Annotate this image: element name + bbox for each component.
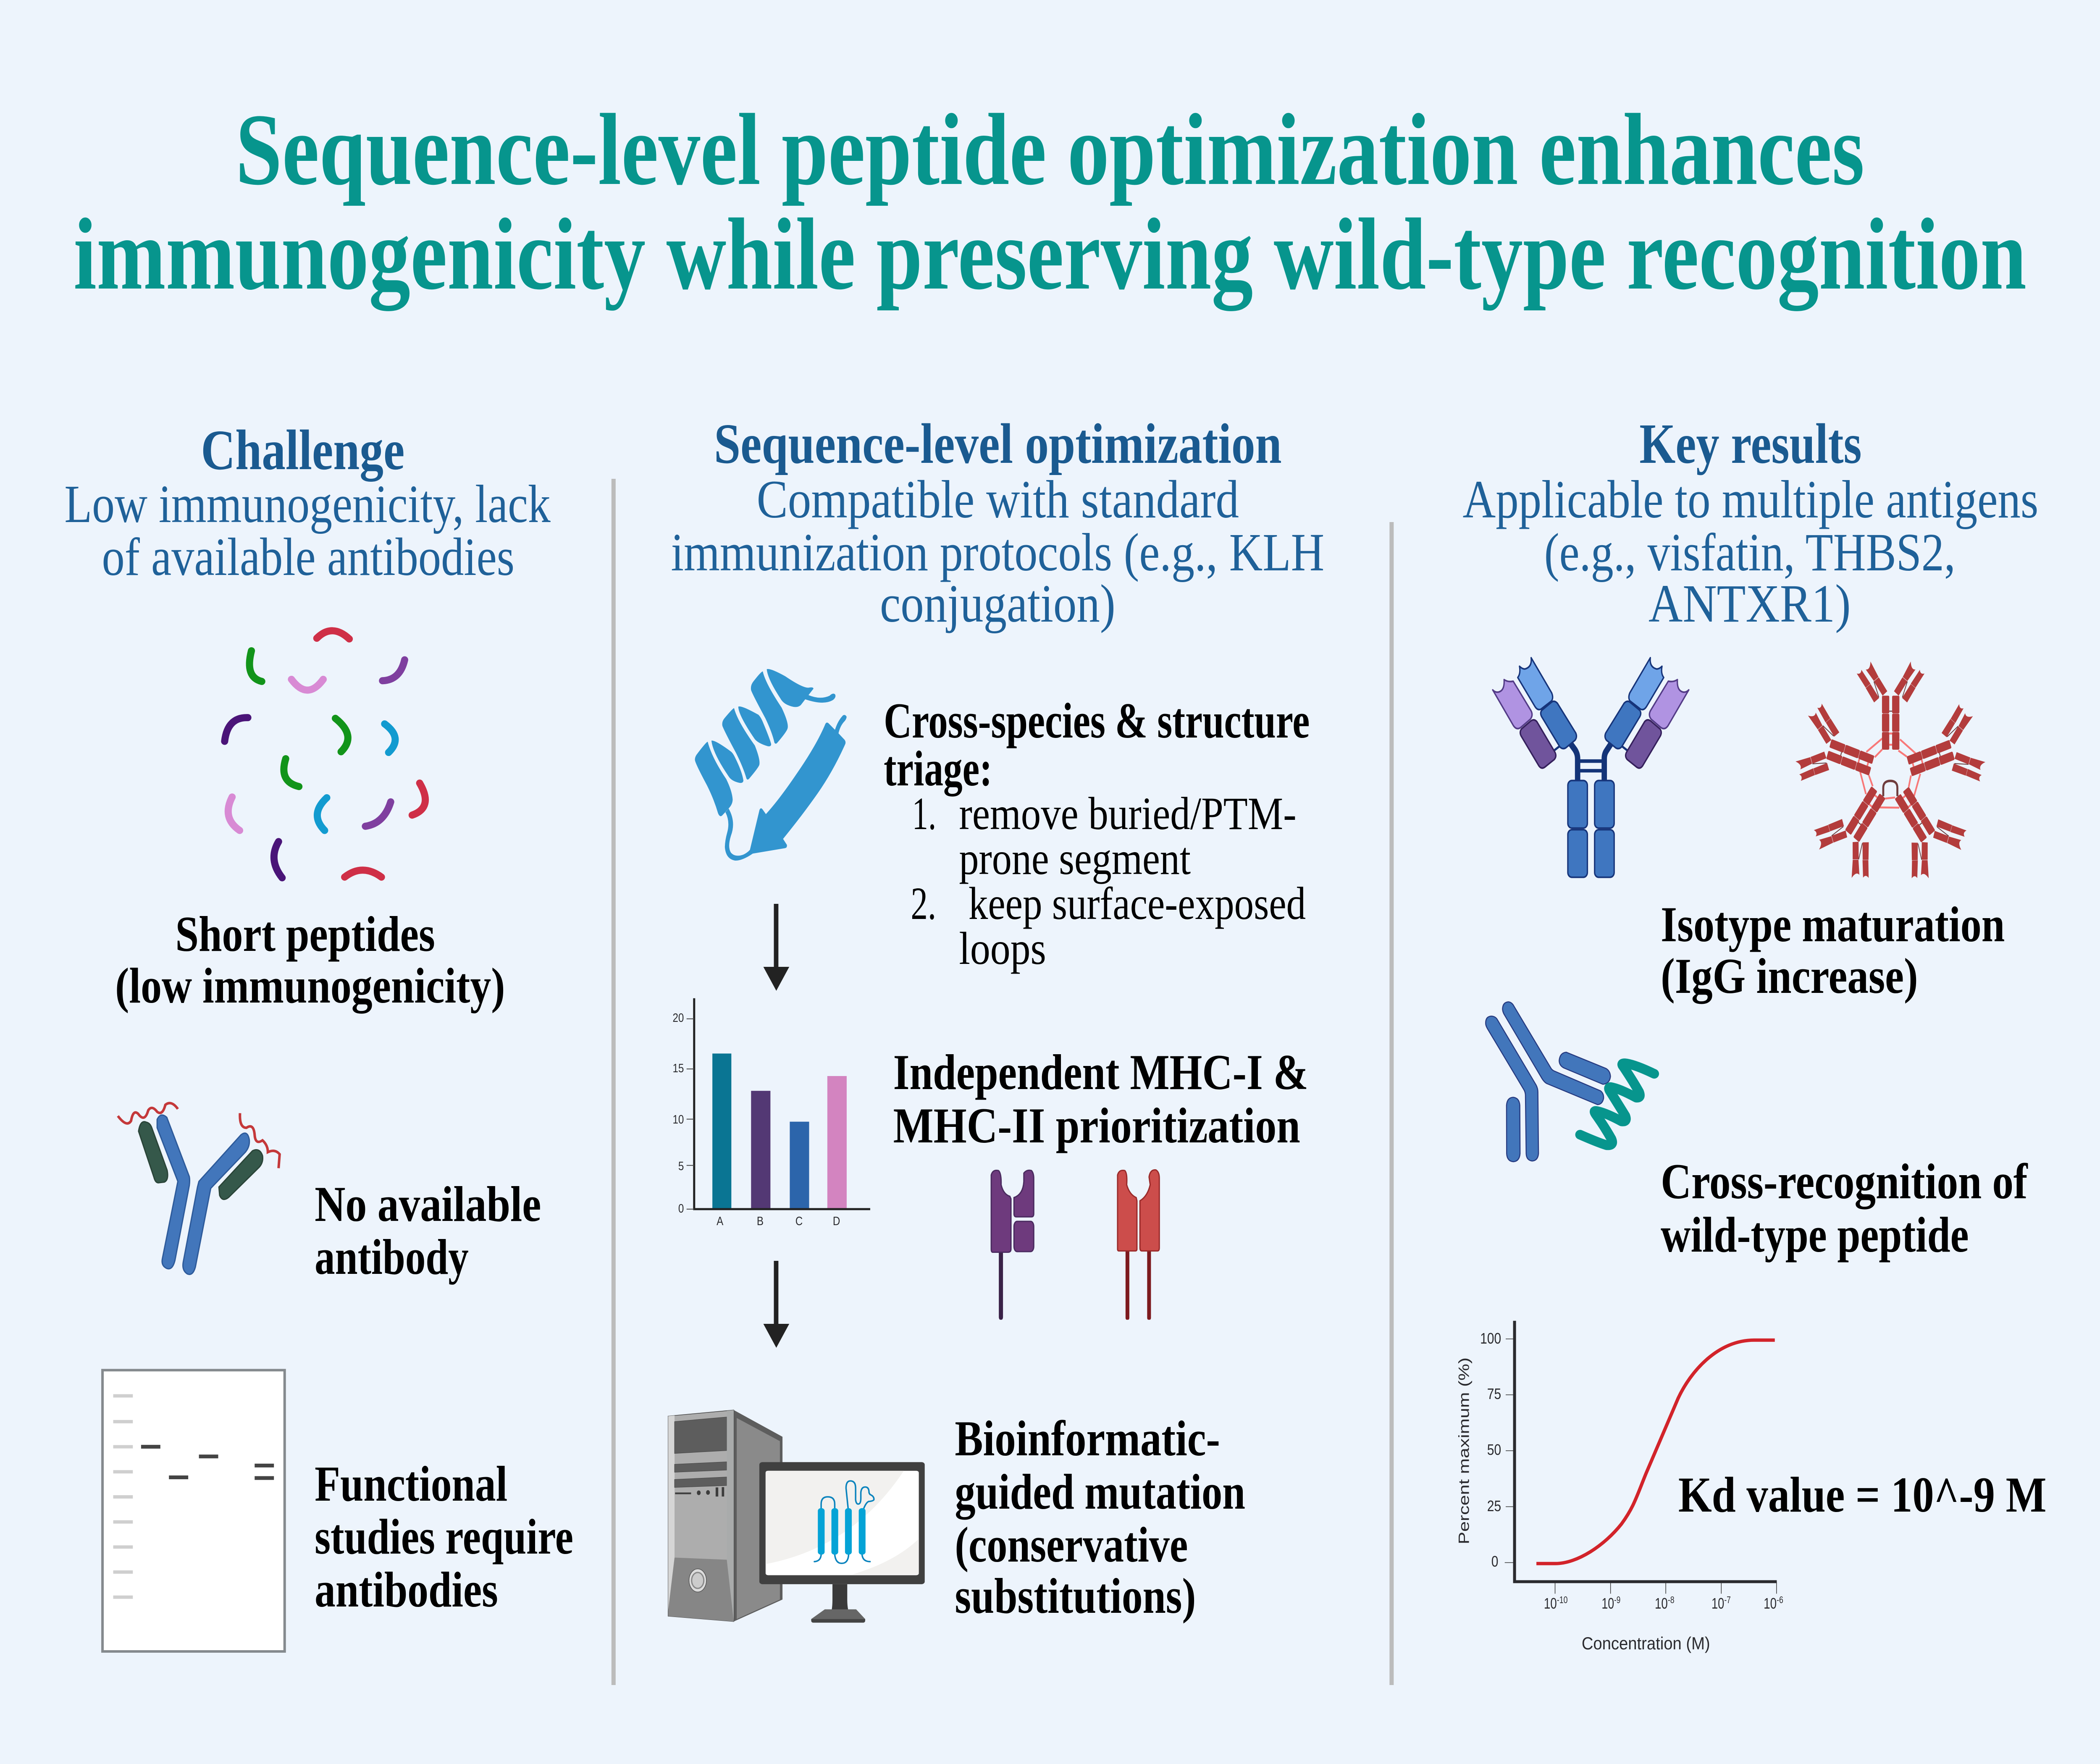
icon: protein structure ribbon (695, 669, 847, 861)
bar chart: 10 (672, 1113, 684, 1126)
icon: short peptides (225, 631, 425, 878)
title: Sequence-level peptide optimization enhances (236, 93, 1864, 206)
label: Kd value: Kd value = 10^-9 M (1678, 1467, 2047, 1522)
label: cross-recognition: wild-type peptide (1661, 1207, 1969, 1263)
heading: key results (1462, 412, 2038, 633)
icon: MHC class I (991, 1170, 1034, 1320)
icon: IgG antibody (1493, 658, 1689, 877)
icon: computer (668, 1410, 925, 1622)
label: cross-species triage: triage: (884, 741, 992, 796)
label: cross-species triage: 1. (912, 788, 936, 839)
chart: binding curve: 50 (1487, 1441, 1501, 1459)
label: cross-recognition: Cross-recognition of (1661, 1154, 2028, 1209)
chart: binding curve: 10 (1544, 1595, 1558, 1612)
label: cross-species triage: prone segment (959, 833, 1191, 884)
heading: challenge: Low immunogenicity, lack (64, 475, 551, 534)
icon: western blot gel (102, 1370, 285, 1651)
label: MHC prioritization (893, 1045, 1308, 1153)
heading: challenge (64, 418, 551, 587)
heading: optimization: conjugation) (880, 574, 1116, 633)
bar chart (672, 998, 870, 1228)
label: bioinformatic-guided mutation (955, 1411, 1245, 1624)
heading: key results: Key results (1639, 412, 1862, 475)
label: cross-recognition (1661, 1154, 2028, 1263)
chart: binding curve: -9 (1614, 1595, 1620, 1605)
heading: key results: (e.g., visfatin, THBS2, (1544, 523, 1956, 582)
label: functional studies: Functional (315, 1456, 507, 1512)
heading: key results: ANTXR1) (1648, 574, 1851, 633)
title: immunogenicity while preserving wild-type recognition (74, 197, 2026, 311)
heading: challenge: of available antibodies (102, 528, 514, 587)
heading: optimization: Sequence-level optimization (714, 412, 1282, 475)
icon: antibody with no binding (118, 1103, 280, 1274)
chart: binding curve: -10 (1557, 1595, 1567, 1605)
label: bioinformatic-guided mutation: guided mutation (955, 1464, 1245, 1520)
label: cross-species triage: 2. (911, 878, 936, 929)
label: no available antibody: No available (315, 1176, 541, 1232)
label: bioinformatic-guided mutation: Bioinformatic- (955, 1411, 1220, 1466)
bar chart: A (717, 1214, 723, 1228)
chart: binding curve: 10 (1601, 1595, 1616, 1612)
label: short peptides: (low immunogenicity) (115, 958, 505, 1013)
icon: MHC class II (1118, 1170, 1159, 1320)
label: no available antibody: antibody (315, 1229, 469, 1285)
label: functional studies: studies require (315, 1509, 573, 1564)
bar chart: 15 (672, 1061, 684, 1075)
chart: binding curve: -7 (1724, 1595, 1731, 1605)
arrow: prioritization to mutation (764, 1261, 789, 1348)
label: no available antibody (315, 1176, 541, 1285)
bar chart: D (833, 1214, 840, 1228)
chart: binding curve: 10 (1764, 1595, 1778, 1612)
title (74, 93, 2026, 311)
label: functional studies: antibodies (315, 1562, 498, 1617)
arrow: triage to prioritization (764, 904, 789, 991)
chart: binding curve: 0 (1491, 1553, 1499, 1570)
label: functional studies (315, 1456, 573, 1617)
label: short peptides: Short peptides (176, 906, 435, 962)
label: cross-species triage: Cross-species & structure (884, 693, 1310, 748)
heading: optimization (671, 412, 1324, 633)
label: isotype maturation: Isotype maturation (1661, 897, 2005, 952)
label: short peptides (115, 906, 505, 1013)
chart: binding curve: 10 (1712, 1595, 1725, 1612)
panel: challenge (64, 418, 573, 1651)
heading: challenge: Challenge (201, 418, 404, 482)
label: cross-species triage: keep surface-exposed (969, 878, 1306, 929)
panel: sequence-level optimization (668, 412, 1324, 1624)
label: isotype maturation: (IgG increase) (1661, 948, 1918, 1004)
chart: binding curve: Concentration (M) (1582, 1634, 1710, 1654)
chart: binding curve: 25 (1487, 1498, 1501, 1515)
chart: binding curve: 10 (1655, 1595, 1669, 1612)
bar chart: B (757, 1214, 764, 1228)
bar chart: C (795, 1214, 803, 1228)
label: cross-species triage: remove buried/PTM- (959, 788, 1297, 839)
chart: binding curve: 75 (1487, 1386, 1501, 1403)
bar chart: 0 (678, 1202, 684, 1215)
bar chart: 20 (672, 1011, 684, 1025)
label: cross-species triage (884, 693, 1310, 974)
bar chart: 5 (678, 1159, 684, 1173)
label: bioinformatic-guided mutation: substitutions) (955, 1568, 1196, 1624)
chart: binding curve: Percent maximum (%) (1456, 1357, 1473, 1544)
icon: IgM pentamer (1791, 662, 1990, 888)
heading: optimization: immunization protocols (e.g., KLH (671, 523, 1324, 582)
chart: binding curve: -6 (1777, 1595, 1783, 1605)
label: isotype maturation (1661, 897, 2005, 1004)
chart: binding curve: -8 (1668, 1595, 1675, 1605)
label: MHC prioritization: MHC-II prioritization (893, 1098, 1300, 1153)
heading: optimization: Compatible with standard (757, 470, 1239, 529)
panel: key results (1456, 412, 2046, 1654)
label: MHC prioritization: Independent MHC-I & (893, 1045, 1308, 1100)
icon: antibody binding peptide (1486, 1002, 1654, 1162)
label: bioinformatic-guided mutation: (conservative (955, 1517, 1188, 1572)
chart: binding curve (1456, 1321, 1783, 1654)
heading: key results: Applicable to multiple antigens (1462, 470, 2038, 529)
label: cross-species triage: loops (959, 923, 1046, 974)
chart: binding curve: 100 (1480, 1330, 1501, 1347)
